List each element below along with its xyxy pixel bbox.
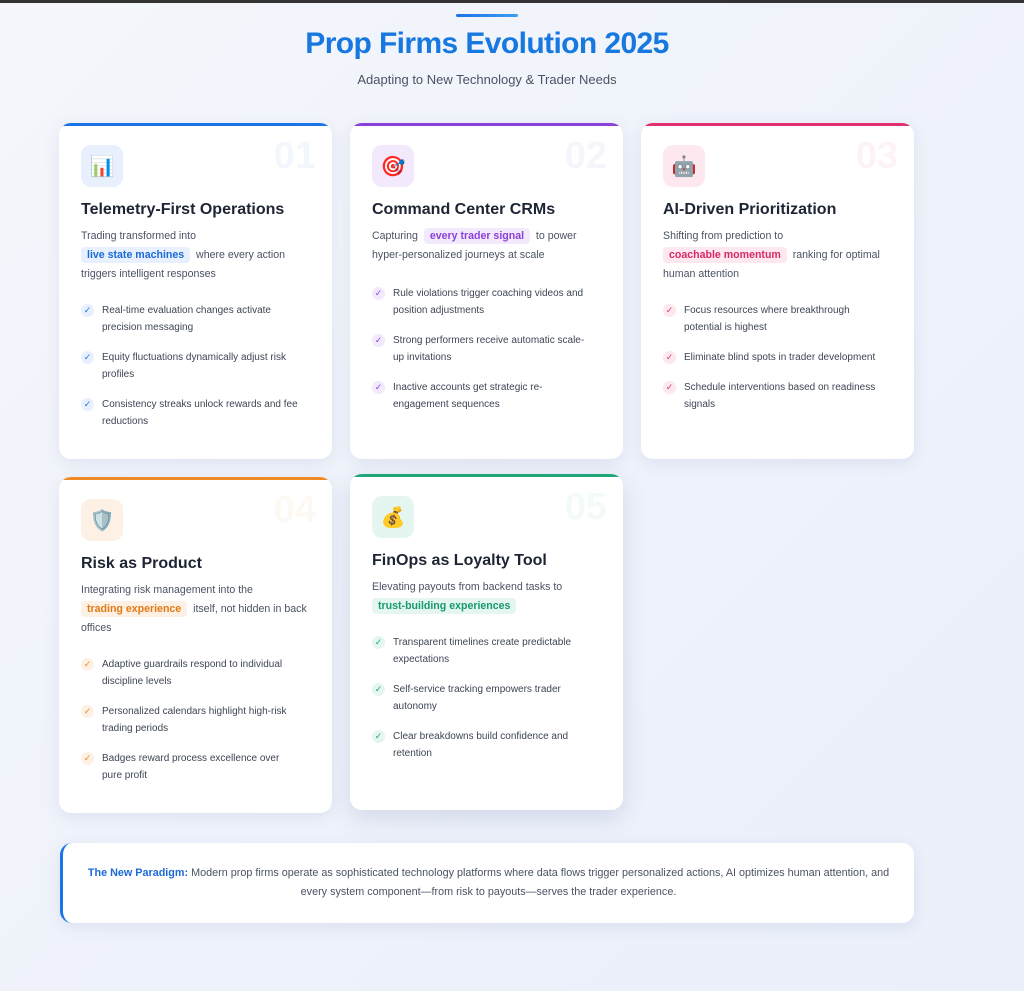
icon: bar chart: 📊 xyxy=(90,156,114,178)
heading: FinOps as Loyalty Tool xyxy=(372,552,547,569)
bullets: Transparent timelines create predictable expectations xyxy=(393,637,571,665)
bullets: Focus resources where breakthrough potential is highest xyxy=(684,305,850,333)
description xyxy=(81,584,307,634)
bullets: ✓ xyxy=(666,352,673,362)
bullets: ✓ xyxy=(375,731,382,741)
bullets: ✓ xyxy=(375,637,382,647)
bullets: ✓ xyxy=(84,352,91,362)
icon: bar chart xyxy=(81,145,123,187)
bullets: Adaptive guardrails respond to individual discipline levels xyxy=(102,659,282,687)
bullets: ✓ xyxy=(666,382,673,392)
panel: 05 finops xyxy=(350,474,623,810)
callout: new paradigm xyxy=(60,843,914,923)
panel: 01 telemetry: 01 xyxy=(274,135,316,177)
bullets: ✓ xyxy=(84,753,91,763)
bullets: Badges reward process excellence over pure profit xyxy=(102,753,279,781)
bullets xyxy=(372,636,571,759)
bullets: ✓ xyxy=(375,382,382,392)
bullets: Rule violations trigger coaching videos and position adjustments xyxy=(393,288,583,316)
header accent line xyxy=(456,14,518,17)
description xyxy=(663,230,880,280)
title: Prop Firms Evolution 2025 xyxy=(305,27,669,60)
panel: 04 risk: 04 xyxy=(274,489,316,531)
bullets: ✓ xyxy=(666,305,673,315)
subtitle: Adapting to New Technology & Trader Needs xyxy=(357,72,617,87)
bullets xyxy=(372,287,584,410)
description: Shifting from prediction to xyxy=(663,230,783,242)
panel: 03 AI xyxy=(641,123,914,459)
description: Capturing every trader signal to power hyper-personalized journeys at scale xyxy=(372,230,577,261)
description: coachable momentum ranking for optimal human attention xyxy=(663,249,880,280)
bullets: ✓ xyxy=(84,659,91,669)
panel: 03 AI: 03 xyxy=(856,135,898,177)
bullets xyxy=(81,658,287,781)
description: Elevating payouts from backend tasks to xyxy=(372,581,562,593)
description xyxy=(81,230,285,280)
bullets: Inactive accounts get strategic re-engagement sequences xyxy=(393,382,543,410)
heading: AI-Driven Prioritization xyxy=(663,201,836,218)
bullets: Schedule interventions based on readiness signals xyxy=(684,382,875,410)
description: trust-building experiences xyxy=(378,600,510,612)
bullets: Consistency streaks unlock rewards and fee reductions xyxy=(102,399,298,427)
bullets: ✓ xyxy=(375,684,382,694)
icon: shield: 🛡️ xyxy=(90,510,114,532)
description: live state machines where every action triggers intelligent responses xyxy=(81,249,285,280)
bullets xyxy=(663,304,876,410)
bullets: ✓ xyxy=(84,706,91,716)
bullets: Self-service tracking empowers trader autonomy xyxy=(393,684,561,712)
panel: 05 finops: 05 xyxy=(565,486,607,528)
callout: new paradigm: The New Paradigm: Modern prop firms operate as sophisticated technology platforms where data flows trigger personalized actions, AI optimizes human attention, and every system component—from risk to payouts—serves the trader experience. xyxy=(88,867,889,898)
icon: robot xyxy=(663,145,705,187)
bullets: ✓ xyxy=(84,305,91,315)
bullets: Personalized calendars highlight high-risk trading periods xyxy=(102,706,287,734)
bullets: Equity fluctuations dynamically adjust risk profiles xyxy=(102,352,286,380)
icon: target xyxy=(372,145,414,187)
bullets: Eliminate blind spots in trader development xyxy=(684,352,875,363)
icon: target: 🎯 xyxy=(381,156,405,178)
panel: 02 CRM: 02 xyxy=(565,135,607,177)
bullets: Clear breakdowns build confidence and retention xyxy=(393,731,568,759)
heading: Risk as Product xyxy=(81,555,202,572)
bullets: ✓ xyxy=(375,288,382,298)
bullets: ✓ xyxy=(84,399,91,409)
icon: money bag xyxy=(372,496,414,538)
panel: 01 telemetry xyxy=(59,123,332,459)
bullets xyxy=(81,304,298,427)
description: Integrating risk management into the xyxy=(81,584,253,596)
panel: 04 risk xyxy=(59,477,332,813)
description: trading experience itself, not hidden in back offices xyxy=(81,603,307,634)
heading: Telemetry-First Operations xyxy=(81,201,284,218)
heading: Command Center CRMs xyxy=(372,201,555,218)
icon: money bag: 💰 xyxy=(381,506,405,528)
description: Trading transformed into xyxy=(81,230,196,242)
description xyxy=(372,581,562,614)
icon: shield xyxy=(81,499,123,541)
panel: 02 CRM xyxy=(350,123,623,459)
bullets: Strong performers receive automatic scale-up invitations xyxy=(393,335,584,363)
bullets: ✓ xyxy=(375,335,382,345)
bullets: Real-time evaluation changes activate precision messaging xyxy=(102,305,271,333)
icon: robot: 🤖 xyxy=(672,156,696,178)
